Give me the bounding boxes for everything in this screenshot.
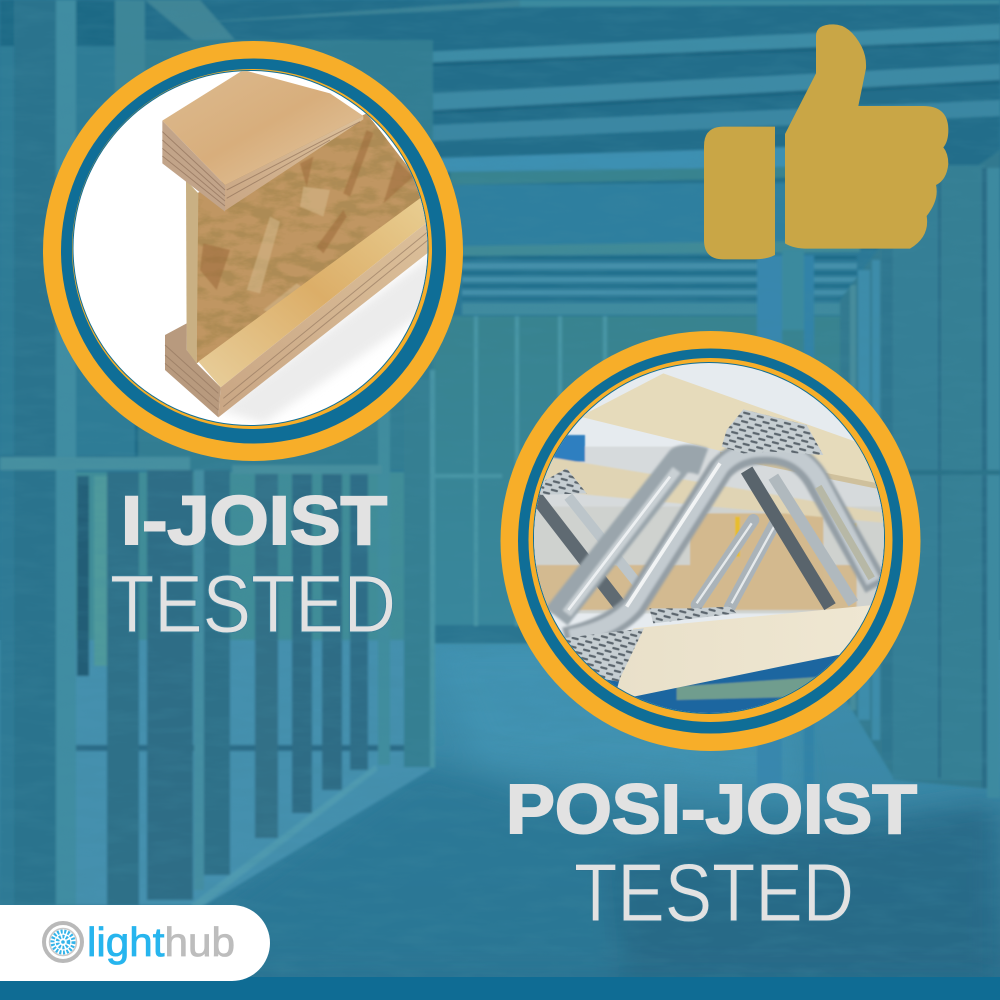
label: I-Joist Tested bbox=[110, 482, 396, 650]
circle badge: Posi-joist photo bbox=[500, 331, 920, 753]
label: Posi-Joist Tested: TESTED bbox=[574, 846, 854, 939]
logo icon bbox=[44, 923, 82, 961]
thumb cuff bbox=[704, 127, 775, 259]
label: I-Joist Tested: TESTED bbox=[110, 559, 396, 650]
slotted metal plates bbox=[722, 409, 823, 455]
ceiling bbox=[130, 0, 1000, 315]
top chord bbox=[580, 373, 893, 490]
circle badge: I-joist photo bbox=[43, 41, 463, 461]
floor bbox=[0, 640, 1000, 1000]
metal web joist illustration bbox=[534, 363, 884, 713]
bottom chord bbox=[617, 605, 873, 697]
I-joist beam illustration bbox=[162, 70, 447, 423]
left wall framing bbox=[0, 0, 435, 908]
OSB chips bbox=[247, 187, 330, 317]
background struts bbox=[533, 493, 623, 610]
hand bbox=[785, 24, 948, 249]
back wall bbox=[430, 250, 850, 790]
logo: lighthub pill bbox=[0, 905, 270, 981]
front struts bbox=[557, 449, 877, 640]
logo wordmark: lighthub bbox=[87, 919, 235, 965]
label: Posi-Joist Tested bbox=[506, 770, 917, 939]
icon: thumbs up bbox=[704, 24, 948, 259]
footer bar bbox=[0, 977, 1000, 1000]
right wall with studs bbox=[840, 150, 1000, 798]
label: I-Joist Tested: I-JOIST bbox=[121, 482, 387, 559]
label: Posi-Joist Tested: POSI-JOIST bbox=[506, 770, 917, 848]
